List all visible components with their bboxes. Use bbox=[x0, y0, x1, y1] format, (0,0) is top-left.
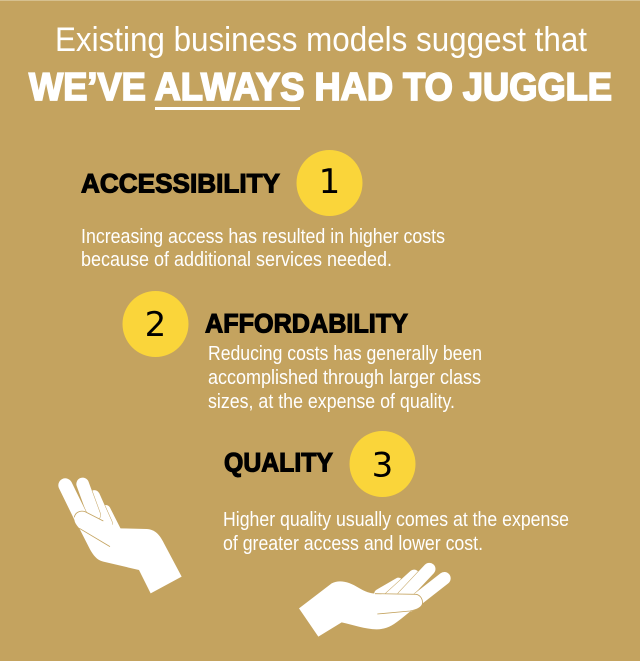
icon: right hand bbox=[299, 569, 444, 637]
text: accessibility: Increasing access has resulted in higher costs bbox=[81, 226, 445, 248]
panel: affordability bbox=[122, 291, 482, 413]
text: accessibility: because of additional services needed. bbox=[81, 249, 392, 271]
number badge 3 bbox=[350, 431, 416, 497]
panel: quality bbox=[223, 431, 569, 555]
number badge 2 bbox=[122, 291, 188, 357]
icon: left hand bbox=[65, 484, 182, 593]
text: quality: of greater access and lower cost. bbox=[223, 533, 483, 555]
text: affordability: accomplished through larger class bbox=[208, 367, 481, 389]
title line 1: Existing business models suggest that bbox=[55, 21, 587, 59]
heading: accessibility: ACCESSIBILITY bbox=[81, 168, 280, 198]
title bbox=[29, 21, 612, 110]
heading: quality: QUALITY bbox=[224, 448, 333, 478]
number badge 1 bbox=[296, 150, 362, 216]
text: affordability: Reducing costs has generally been bbox=[208, 343, 482, 365]
title line 2: WE’VE ALWAYS HAD TO JUGGLE bbox=[29, 66, 612, 109]
heading: affordability: AFFORDABILITY bbox=[205, 308, 408, 338]
number badge 2: 2 bbox=[145, 305, 166, 345]
number badge 1: 1 bbox=[319, 162, 340, 202]
title underline bbox=[155, 107, 300, 110]
panel: accessibility bbox=[81, 150, 445, 271]
text: affordability: sizes, at the expense of quality. bbox=[208, 391, 455, 413]
number badge 3: 3 bbox=[372, 446, 393, 486]
text: quality: Higher quality usually comes at the expense bbox=[223, 509, 569, 531]
